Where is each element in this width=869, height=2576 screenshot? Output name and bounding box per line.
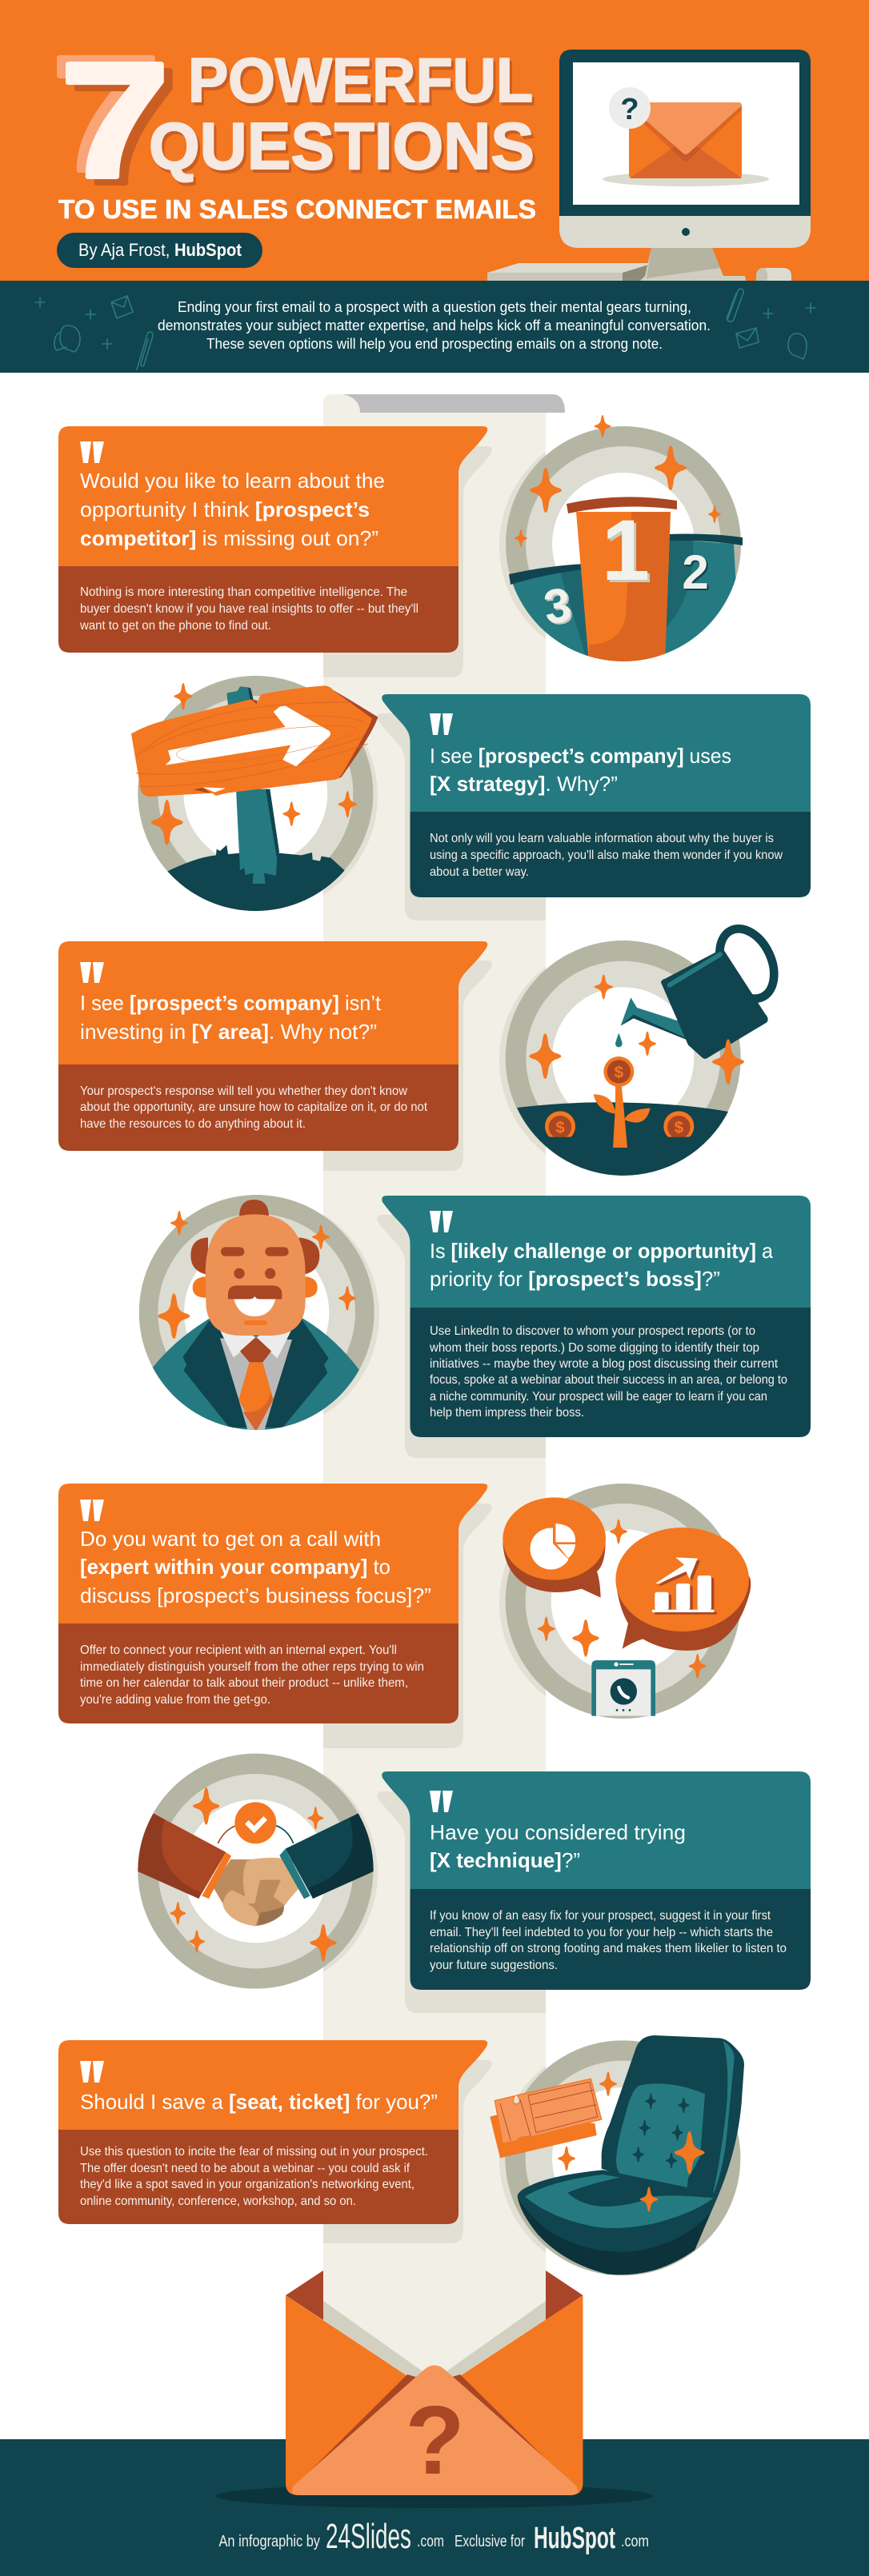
body text: have the resources to do anything about it. — [80, 1117, 306, 1131]
icon: desktop computer — [487, 50, 811, 281]
can spout — [621, 997, 692, 1042]
question bubble: ? — [620, 93, 639, 126]
question text: opportunity I think [prospect’s — [80, 497, 370, 521]
podium numbers — [540, 501, 711, 636]
body text: they'd like a spot saved in your organization's networking event, — [80, 2178, 414, 2191]
big number 7 — [51, 22, 178, 218]
question text — [80, 469, 385, 550]
suit — [153, 1317, 359, 1432]
body text — [80, 1643, 424, 1707]
body text: using a specific approach, you'll also make them wonder if you know — [430, 849, 783, 862]
question text: [expert within your company] to — [80, 1555, 390, 1579]
post — [226, 686, 279, 884]
body text — [430, 1909, 787, 1972]
podium 1 — [576, 512, 671, 664]
body text: want to get on the phone to find out. — [79, 619, 271, 633]
panel: question 6 — [382, 1771, 811, 1990]
sparkles — [151, 683, 357, 845]
left sleeve — [138, 1813, 231, 1899]
body text: Use this question to incite the fear of missing out in your prospect. — [80, 2145, 428, 2159]
head — [206, 1214, 306, 1336]
sparkles — [558, 2071, 705, 2212]
sign edge — [326, 686, 378, 780]
podium numbers: 2 — [682, 545, 709, 599]
seat base — [518, 2170, 719, 2274]
intro text: These seven options will help you end prospecting emails on a strong note. — [206, 335, 663, 352]
monitor bezel — [559, 50, 811, 216]
question text: discuss [prospect’s business focus]?” — [80, 1584, 431, 1608]
QUESTIONS: QUESTIONS — [151, 112, 537, 186]
panel: question 5 — [58, 1484, 487, 1723]
monitor screen — [573, 62, 799, 205]
footer band — [0, 2439, 869, 2576]
podium numbers: 3 — [543, 579, 576, 636]
body text: Use LinkedIn to discover to whom your prospect reports (or to — [430, 1324, 755, 1338]
seat cushion — [525, 2175, 714, 2228]
big number 7: 7 — [69, 35, 178, 218]
question text — [80, 1527, 431, 1608]
author pill — [57, 233, 262, 268]
footer credits: .com — [417, 2533, 444, 2550]
sign board — [131, 685, 372, 797]
illustration: handshake — [138, 1754, 374, 1989]
body text: relationship off on strong footing and makes them likelier to listen to — [430, 1942, 787, 1955]
envelope front — [286, 2295, 583, 2495]
big number 7: 7 — [51, 22, 161, 206]
question text: Have you considered trying — [430, 1820, 686, 1844]
power dot — [682, 228, 690, 236]
body text: Not only will you learn valuable information about why the buyer is — [430, 832, 774, 845]
question text: investing in [Y area]. Why not?” — [80, 1020, 377, 1044]
seat side trim — [712, 2041, 735, 2197]
podium numbers: 2 — [683, 547, 711, 601]
monitor chin — [559, 216, 811, 248]
body text: focus, spoke at a webinar about their success in an area, or belong to — [430, 1373, 787, 1387]
wood grain — [136, 702, 368, 787]
ears — [193, 1276, 318, 1298]
question text: [X strategy]. Why?” — [430, 772, 618, 796]
question text: Do you want to get on a call with — [80, 1527, 381, 1551]
pie chart — [530, 1528, 569, 1570]
body text — [429, 1324, 787, 1420]
body text: whom their boss reports.) Do some digging to identify their top — [429, 1341, 759, 1355]
plant — [594, 1056, 651, 1148]
illustration: podium — [496, 415, 743, 664]
arrow — [166, 706, 330, 766]
face — [221, 1247, 289, 1325]
question text — [80, 991, 382, 1044]
question text: competitor] is missing out on?” — [80, 526, 378, 550]
inner shadow — [323, 2301, 546, 2391]
ground — [517, 1102, 728, 1176]
keyboard — [487, 263, 655, 281]
sparkles — [515, 415, 721, 547]
intro text: Ending your first email to a prospect with a question gets their mental gears turning, — [178, 298, 691, 315]
body text: about the opportunity, are unsure how to capitalize on it, or do not — [80, 1100, 428, 1114]
mouse — [756, 268, 791, 281]
water drop — [615, 1033, 623, 1047]
right sleeve — [279, 1813, 374, 1899]
front flap — [292, 2366, 578, 2495]
tufting — [632, 2093, 690, 2169]
POWERFUL: POWERFUL — [188, 45, 533, 115]
intro text: demonstrates your subject matter expertise, and helps kick off a meaningful conversation. — [158, 317, 711, 333]
sparkles — [538, 1520, 707, 1679]
body text: Your prospect's response will tell you whether they don't know — [80, 1084, 407, 1098]
question text — [430, 1820, 686, 1872]
body text: immediately distinguish yourself from the other reps trying to win — [80, 1660, 424, 1674]
email envelope — [603, 102, 769, 186]
seat mid — [518, 2170, 719, 2252]
big number 7: 7 — [60, 29, 170, 212]
check badge — [234, 1802, 276, 1843]
sparkles: portrait — [158, 1211, 356, 1339]
illustration: watering can — [506, 920, 785, 1176]
plant: $ — [615, 1063, 624, 1081]
intro band — [0, 281, 869, 373]
body text: buyer doesn't know if you have real insights to offer -- but they'll — [80, 602, 418, 616]
question text: Should I save a [seat, ticket] for you?” — [80, 2090, 438, 2114]
panel: question 2 — [382, 694, 811, 897]
sign notches — [194, 699, 258, 793]
bubble pie chart — [503, 1497, 606, 1598]
quote mark — [430, 1791, 453, 1812]
body text: initiatives -- maybe they wrote a blog post discussing their current — [430, 1357, 779, 1371]
quote mark — [80, 1500, 104, 1521]
question text: I see [prospect’s company] isn’t — [80, 991, 382, 1015]
QUESTIONS: QUESTIONS — [149, 109, 535, 183]
ground shadow — [216, 2484, 653, 2508]
podium 2 — [653, 541, 736, 657]
body text: time on her calendar to talk about their product -- unlike them, — [80, 1676, 408, 1690]
can handle — [709, 920, 785, 1008]
question text: I see [prospect’s company] uses — [430, 744, 731, 768]
buried coins: $ — [555, 1119, 565, 1137]
footer credits: Exclusive for — [455, 2533, 525, 2550]
back cushion — [616, 2083, 705, 2191]
illustration: signpost — [131, 676, 378, 911]
buried coins: $ — [675, 1119, 684, 1137]
ground — [167, 845, 345, 911]
author pill: By Aja Frost, HubSpot — [78, 240, 242, 260]
footer credits — [219, 2517, 649, 2556]
body text — [430, 832, 783, 879]
connecting arcs — [218, 1826, 294, 1843]
body text: email. They'll feel indebted to you for your help -- which starts the — [430, 1926, 773, 1939]
monitor stand — [640, 248, 746, 281]
bubble bar chart — [615, 1528, 751, 1651]
question mark: ? — [405, 2386, 465, 2494]
body text: your future suggestions. — [430, 1959, 558, 1972]
title — [51, 22, 537, 225]
quote mark — [430, 713, 453, 735]
footer credits: .com — [621, 2533, 649, 2550]
arrow grain — [176, 725, 356, 762]
question text — [430, 744, 731, 796]
body text: about a better way. — [430, 865, 529, 879]
flap edges — [292, 2374, 576, 2489]
ticket back — [490, 2114, 597, 2158]
body text: you're adding value from the get-go. — [80, 1693, 270, 1707]
bars — [655, 1560, 717, 1615]
panel: question 3 — [58, 941, 487, 1151]
body text: a niche community. Your prospect will be eager to learn if you can — [430, 1390, 767, 1404]
question bubble — [609, 87, 651, 129]
footer credits: 24Slides — [326, 2517, 411, 2556]
body text: online community, conference, workshop, and so on. — [80, 2195, 356, 2208]
sparkles — [170, 1787, 337, 1962]
header background — [0, 0, 869, 281]
envelope back flaps — [286, 2270, 583, 2320]
can highlight — [670, 954, 720, 985]
question text: Is [likely challenge or opportunity] a — [430, 1239, 774, 1263]
footer credits: An infographic by — [219, 2533, 320, 2550]
quote mark — [80, 441, 104, 463]
envelope — [216, 2295, 653, 2508]
letter strip — [323, 394, 565, 2387]
ticket front — [495, 2079, 602, 2143]
intro text — [158, 298, 711, 352]
question text — [430, 1239, 774, 1291]
strip shadows — [323, 446, 546, 2253]
body text: The offer doesn't need to be about a webinar -- you could ask if — [80, 2162, 410, 2175]
question text: priority for [prospect’s boss]?” — [430, 1267, 720, 1291]
sparkles — [529, 975, 744, 1084]
illustration: seat and tickets — [490, 2035, 744, 2275]
body text: help them impress their boss. — [430, 1406, 584, 1420]
body text — [80, 1084, 428, 1131]
quote mark — [80, 2061, 104, 2083]
panel: question 1 — [58, 426, 487, 653]
band icons left — [35, 296, 153, 369]
question text: [X technique]?” — [430, 1848, 580, 1872]
illustration: chat bubbles and phone — [503, 1484, 751, 1719]
body text: Nothing is more interesting than competitive intelligence. The — [80, 585, 407, 599]
question text: Would you like to learn about the — [80, 469, 385, 493]
hair — [190, 1200, 319, 1275]
body text — [79, 585, 418, 633]
seat back — [602, 2035, 744, 2194]
illustration: boss portrait — [139, 1195, 374, 1432]
panel: question 4 — [382, 1196, 811, 1437]
body text — [80, 2145, 428, 2208]
can body — [661, 949, 768, 1059]
podium numbers: 3 — [540, 577, 575, 634]
subtitle: TO USE IN SALES CONNECT EMAILS — [58, 195, 536, 225]
POWERFUL: POWERFUL — [190, 48, 535, 118]
band icons right — [727, 289, 815, 359]
quote mark — [430, 1211, 453, 1232]
podium numbers: 1 — [602, 501, 650, 598]
hands — [213, 1858, 298, 1926]
panel: question 7 — [58, 2040, 487, 2224]
footer credits: HubSpot — [534, 2522, 615, 2555]
buried coins — [545, 1111, 695, 1137]
body text: Offer to connect your recipient with an internal expert. You'll — [80, 1643, 397, 1657]
phone — [591, 1660, 655, 1716]
podium numbers: 1 — [604, 504, 652, 601]
quote mark — [80, 962, 104, 983]
body text: If you know of an easy fix for your prospect, suggest it in your first — [430, 1909, 771, 1923]
podium 3 — [512, 569, 595, 658]
